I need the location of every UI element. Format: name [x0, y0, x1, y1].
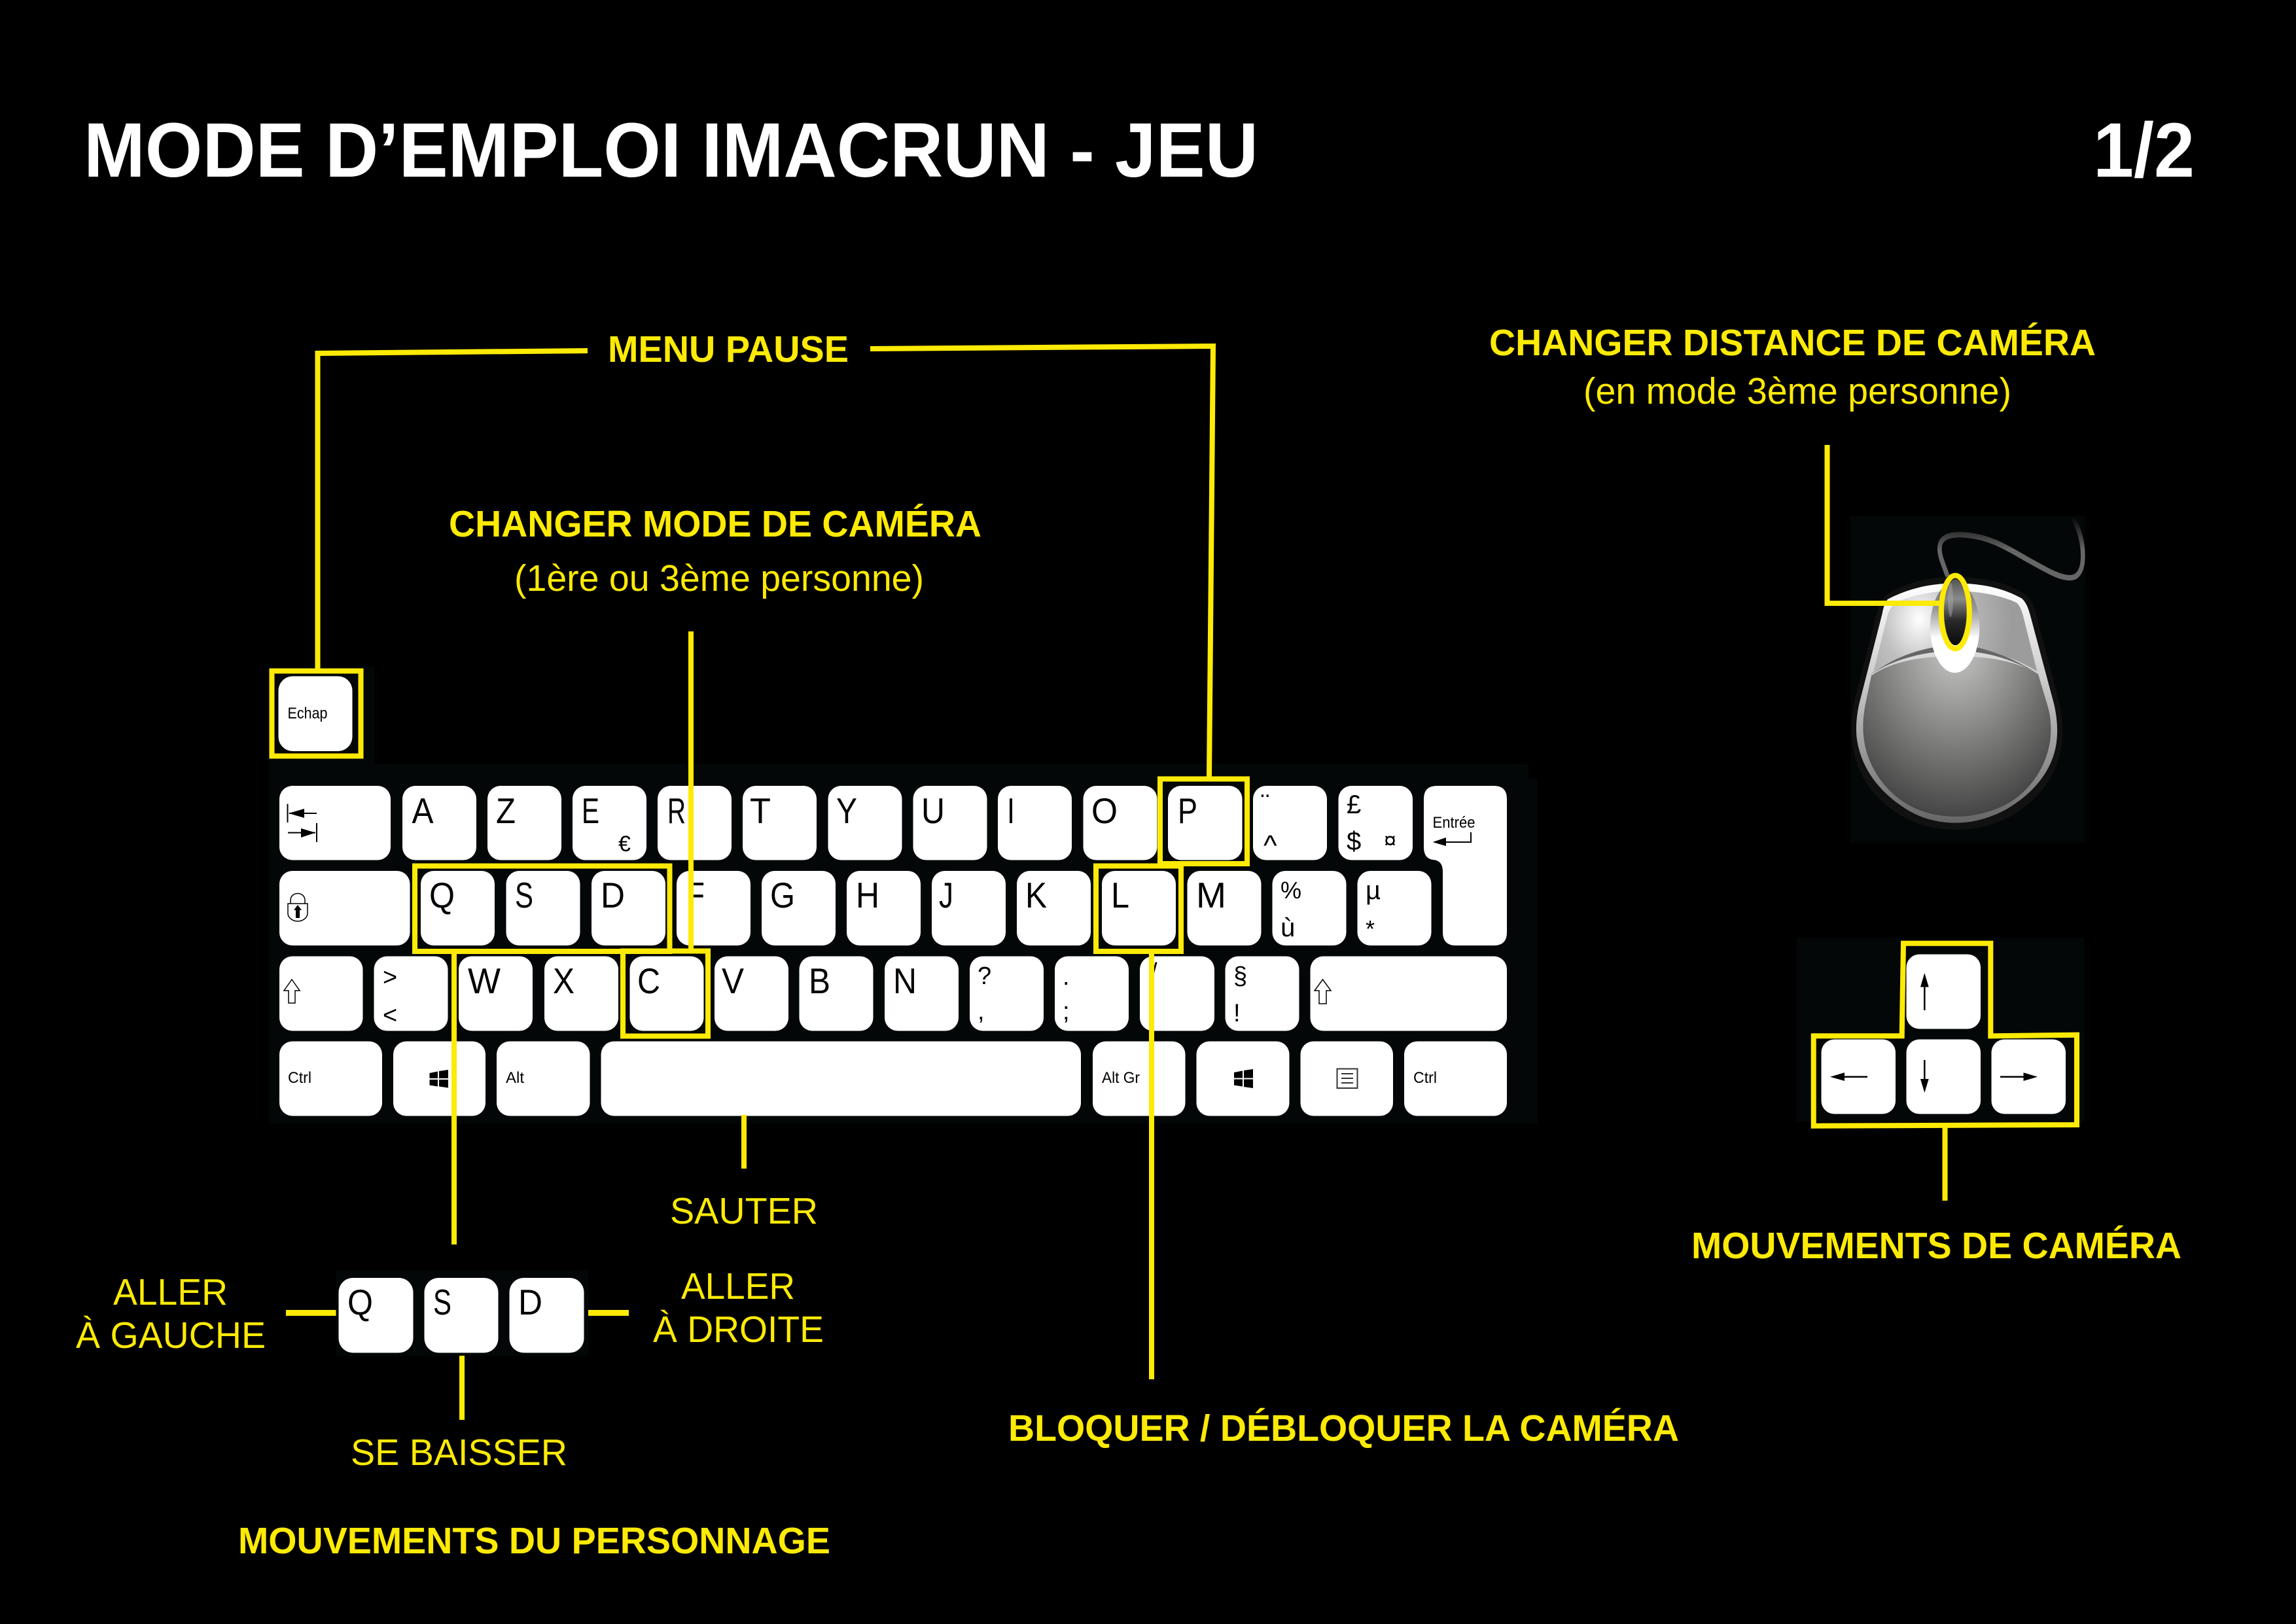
highlight: L: [1096, 866, 1181, 951]
row 3 keys: !: [1233, 1000, 1241, 1027]
row 2 keys: J: [939, 875, 953, 915]
label: change camera distance: [1489, 322, 2096, 412]
row 4 keys: Alt Gr: [1102, 1069, 1140, 1087]
row 2 keys: [279, 871, 1432, 945]
key: mini D: D: [518, 1282, 542, 1322]
row 3 keys: N: [893, 961, 917, 1001]
key: Echap: Echap: [288, 705, 327, 722]
row 2 keys: %: [1280, 877, 1301, 904]
mini keys background: [336, 1271, 588, 1356]
label: go left: À GAUCHE: [76, 1315, 266, 1356]
key: mini Q: [339, 1278, 414, 1353]
connector: menu pause right: [870, 346, 1213, 777]
connector: mouse wheel: [1827, 445, 1941, 603]
row 4 keys: Alt: [506, 1069, 524, 1087]
page number: 1/2: [2093, 107, 2195, 194]
row 1 keys: I: [1007, 790, 1015, 831]
row 2 keys: M: [1196, 875, 1226, 915]
key: mini S: S: [433, 1282, 451, 1322]
key: Entrée: Entrée: [1433, 814, 1475, 832]
row 1 keys: P: [1178, 790, 1197, 831]
label: menu pause: MENU PAUSE: [608, 328, 849, 370]
connector: L: [1149, 953, 1154, 1379]
row 3 keys: V: [722, 961, 744, 1001]
row 3 keys: ,: [978, 998, 985, 1025]
label: change camera mode: [449, 503, 981, 599]
row 2 keys: Q: [429, 875, 455, 915]
highlight: mouse wheel: [1941, 576, 1969, 649]
icon: mouse: [1852, 517, 2083, 830]
row 1 keys: E: [582, 790, 599, 831]
row 1 keys: [279, 786, 1507, 945]
key: up arrow: [1907, 954, 1981, 1029]
highlight: P: [1160, 779, 1247, 864]
row 1 keys: ¨: [1261, 790, 1269, 819]
row 1 keys: €: [618, 832, 631, 856]
key: right arrow: [1992, 1039, 2066, 1114]
key: left arrow: [1822, 1039, 1896, 1114]
key: mini Q: Q: [347, 1282, 373, 1322]
row 1 keys: A: [412, 790, 434, 831]
label: change camera distance: (en mode 3ème personne): [1583, 370, 2011, 412]
row 3 keys: <: [383, 1002, 397, 1029]
highlight: Echap: [272, 671, 361, 756]
highlight boxes and connector lines: [272, 346, 2077, 1420]
connector: crouch: [459, 1356, 465, 1420]
row 3 keys: §: [1233, 962, 1247, 990]
row 2 keys: S: [515, 875, 533, 915]
keyboard background: [269, 667, 1538, 1123]
row 1 keys: R: [667, 790, 686, 831]
row 4 keys: [279, 1042, 1507, 1116]
key: Echap: [279, 677, 352, 751]
title: MODE D’EMPLOI IMACRUN - JEU: [84, 107, 1258, 194]
highlight: arrow keys: [1814, 944, 2077, 1126]
row 3 keys: >: [383, 964, 397, 991]
connector: move left: [286, 1310, 336, 1316]
row 3 keys: /: [1150, 959, 1157, 986]
row 1 keys: $: [1347, 827, 1361, 856]
highlight: C: [623, 951, 708, 1036]
row 4 keys: Ctrl: [1413, 1069, 1437, 1087]
connector: camera mode: [688, 631, 694, 949]
row 2 keys: G: [770, 875, 795, 915]
highlight: QSD: [415, 866, 670, 951]
panel: mouse: [1850, 516, 2085, 843]
row 3 keys: .: [1063, 963, 1070, 991]
connector: menu pause left: [318, 351, 588, 669]
label: character movements: MOUVEMENTS DU PERSONNAGE: [238, 1520, 830, 1562]
label: go right: À DROITE: [653, 1309, 824, 1350]
row 1 keys: U: [921, 790, 945, 831]
row 2 keys: L: [1111, 875, 1129, 915]
key: Entrée: [1424, 786, 1507, 945]
row 2 keys: K: [1025, 875, 1047, 915]
row 3 keys: X: [553, 961, 574, 1001]
label: go left: ALLER: [113, 1271, 228, 1313]
label: change camera mode: CHANGER MODE DE CAMÉRA: [449, 503, 981, 545]
key: mini S: [424, 1278, 499, 1353]
label: lock camera: BLOQUER / DÉBLOQUER LA CAMÉRA: [1008, 1407, 1679, 1449]
row 4 keys: Ctrl: [288, 1069, 311, 1087]
row 2 keys: D: [601, 875, 625, 915]
label: jump: SAUTER: [670, 1190, 818, 1232]
row 1 keys: T: [750, 790, 771, 831]
arrow keys background: [1797, 938, 2085, 1121]
panel: mini QSD keys: [336, 1271, 588, 1356]
row 2 keys: H: [856, 875, 879, 915]
connector: move right: [588, 1310, 629, 1316]
label: go right: [653, 1265, 824, 1350]
key: down arrow: [1907, 1039, 1981, 1114]
row 2 keys: *: [1366, 915, 1375, 942]
row 3 keys: [279, 957, 1507, 1031]
row 2 keys: ù: [1280, 913, 1295, 942]
row 3 keys: ;: [1063, 998, 1070, 1025]
row 1 keys: ¤: [1384, 828, 1396, 853]
mouse background: [1850, 516, 2085, 843]
row 1 keys: Y: [836, 790, 857, 831]
row 1 keys: O: [1091, 790, 1118, 831]
row 3 keys: ?: [978, 962, 991, 990]
connector: QSD to mini keys: [451, 953, 457, 1244]
label: camera movements: MOUVEMENTS DE CAMÉRA: [1691, 1225, 2181, 1267]
row 2 keys: µ: [1366, 876, 1381, 905]
row 1 keys: ^: [1263, 830, 1277, 862]
label: change camera mode: (1ère ou 3ème personne): [514, 557, 924, 599]
connector: space: [741, 1115, 747, 1169]
panel: keyboard: [269, 667, 1538, 1123]
label: go left: [76, 1271, 266, 1356]
connector: arrow keys: [1942, 1125, 1947, 1201]
row 3 keys: C: [637, 961, 660, 1001]
label: go right: ALLER: [681, 1265, 795, 1307]
row 2 keys: F: [686, 875, 705, 915]
panel: arrow keys: [1797, 938, 2085, 1121]
row 3 keys: W: [468, 961, 501, 1001]
row 1 keys: £: [1347, 790, 1361, 819]
label: change camera distance: CHANGER DISTANCE DE CAMÉRA: [1489, 322, 2096, 364]
row 1 keys: Z: [496, 790, 516, 831]
key: mini D: [509, 1278, 584, 1353]
label: crouch: SE BAISSER: [351, 1432, 567, 1474]
row 3 keys: B: [809, 961, 830, 1001]
